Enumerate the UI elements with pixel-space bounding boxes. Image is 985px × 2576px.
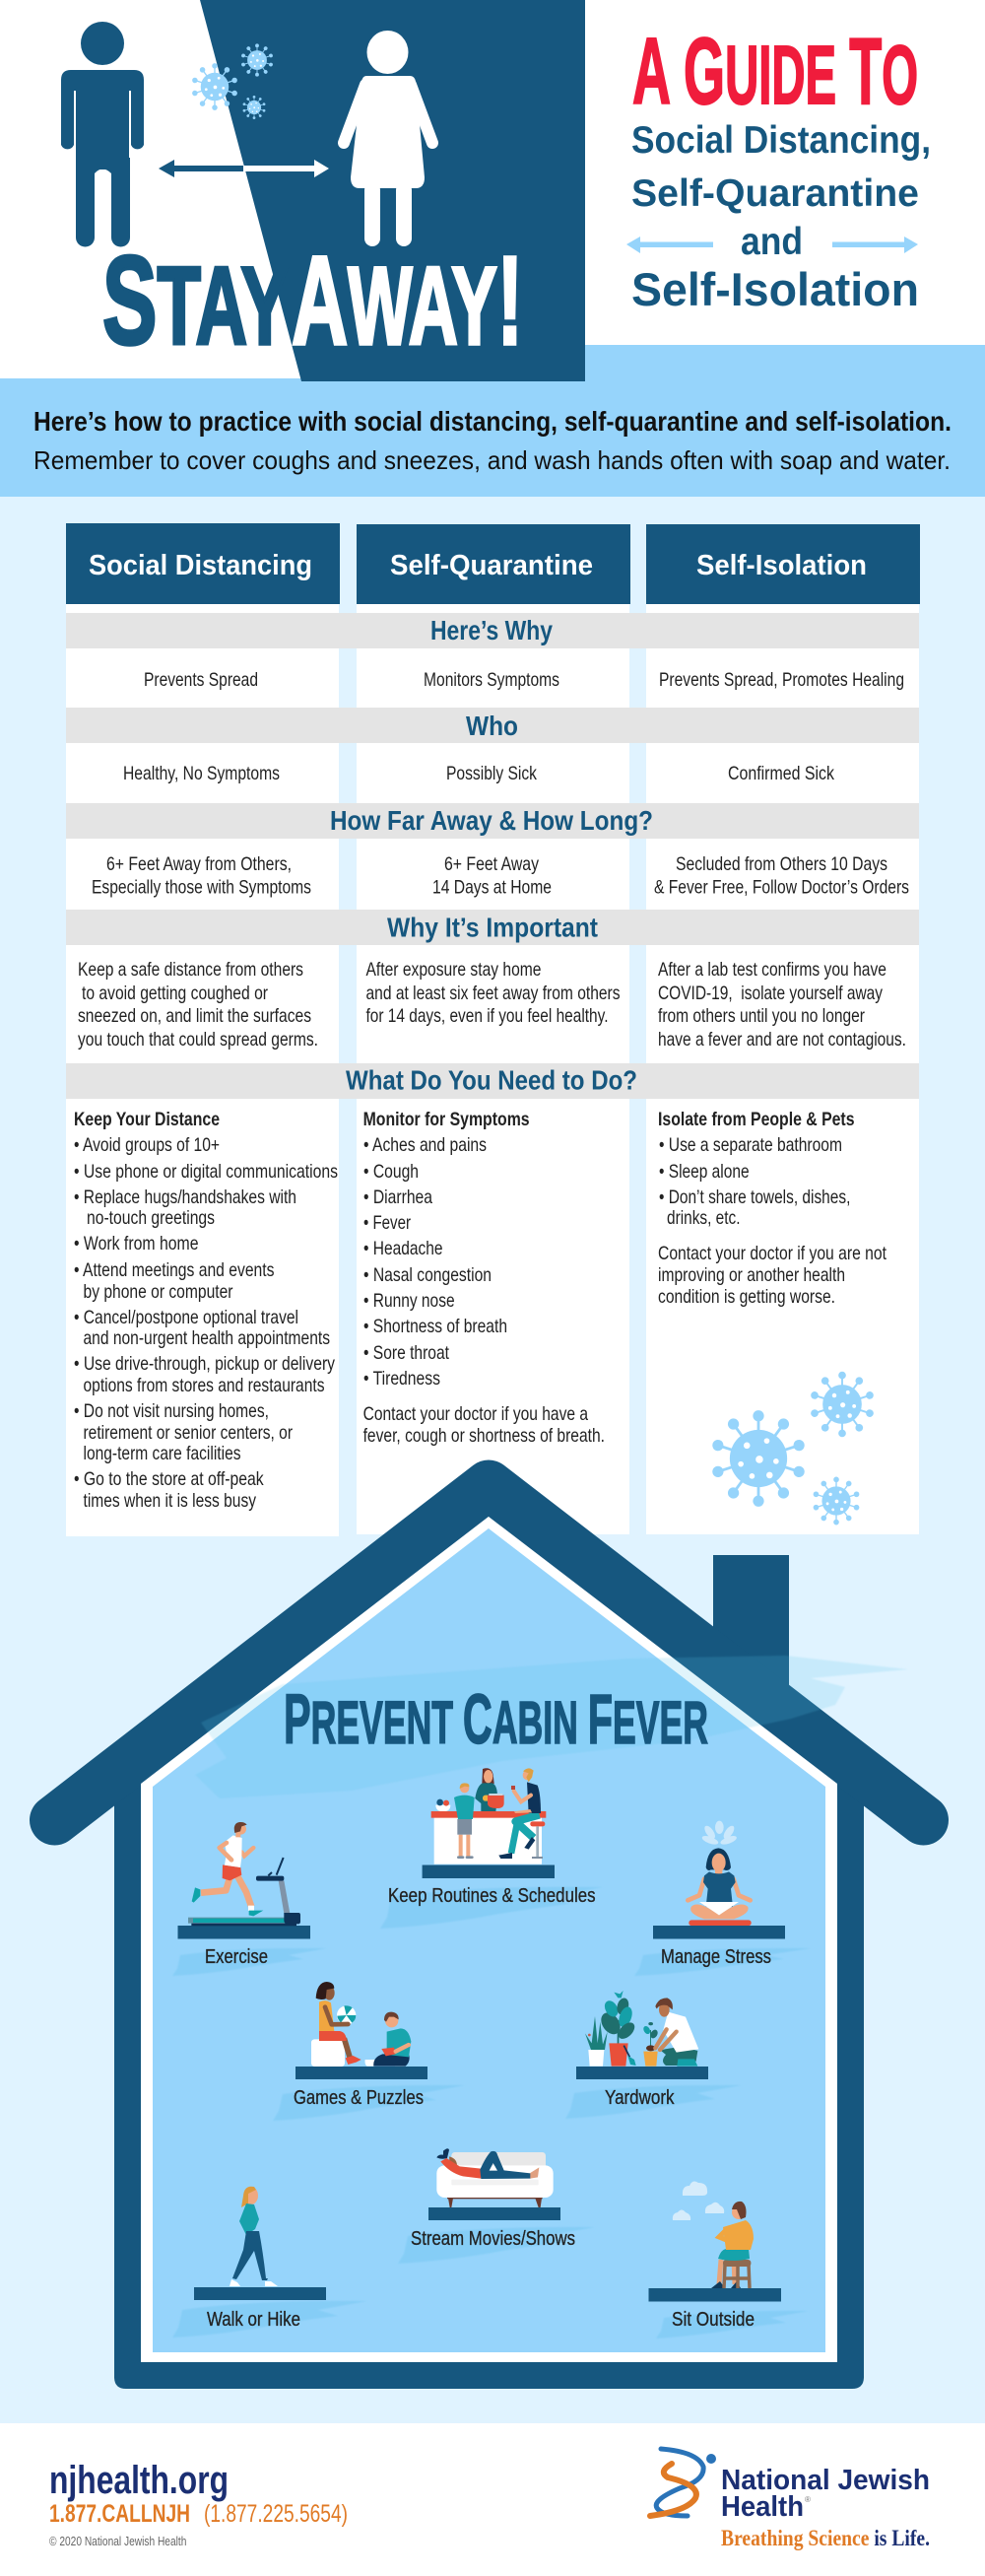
column: keep your distance: Keep Your Distance (74, 1109, 220, 1130)
logo tagline: Breathing Science is Life. (721, 2526, 930, 2550)
icon: virus group (192, 44, 273, 119)
interior light blue (153, 1528, 825, 2352)
illustration: children playing (311, 1982, 411, 2067)
heading: stay: STAY (102, 231, 289, 372)
column: isolate from people and pets (658, 1109, 886, 1308)
column: keep your distance: long-term care facilities (83, 1443, 241, 1464)
column: keep your distance: • Work from home (74, 1233, 199, 1254)
section: why it's important: you touch that could spread germs. (78, 1029, 318, 1051)
section: why it's important: have a fever and are not contagious. (658, 1029, 906, 1051)
section: how far away and how long: How Far Away & How Long? (330, 805, 653, 836)
column: monitor for symptoms: • Aches and pains (363, 1134, 487, 1156)
subtitle: self-isolation: Self-Isolation (631, 263, 919, 315)
subtitle: self-quarantine: Self-Quarantine (631, 172, 919, 215)
arrow: left (626, 237, 713, 253)
section: who: Healthy, No Symptoms (123, 763, 280, 784)
section: how far away and how long: Secluded from Others 10 Days (676, 853, 887, 875)
platform (423, 1864, 555, 1878)
chimney (713, 1555, 789, 1693)
column: keep your distance: options from stores and restaurants (83, 1375, 325, 1396)
platform (653, 1926, 785, 1939)
column: keep your distance: • Avoid groups of 10+ (74, 1134, 220, 1156)
intro regular line: Remember to cover coughs and sneezes, and wash hands often with soap and water. (33, 445, 951, 475)
section: why it's important: and at least six feet away from others (366, 983, 621, 1004)
website: njhealth.org (49, 2459, 229, 2502)
section: why it's important (78, 913, 906, 1051)
subtitle: social distancing: Social Distancing, (631, 119, 931, 162)
section: who (123, 711, 834, 784)
activity: manage stress (634, 1821, 811, 1976)
label: Stream Movies/Shows (411, 2227, 575, 2250)
header: self-isolation: Self-Isolation (696, 550, 867, 581)
section heading: what do you need to do: What Do You Need to Do? (346, 1064, 637, 1096)
dark angled panel (200, 0, 585, 381)
section: how far away and how long: 14 Days at Home (432, 877, 552, 899)
house walls (114, 1774, 864, 2389)
column: monitor for symptoms: • Headache (363, 1238, 443, 1259)
column: keep your distance: retirement or senior centers, or (83, 1422, 293, 1444)
section: here's why: Prevents Spread, Promotes Healing (659, 669, 904, 691)
activity: stream movies and shows (398, 2148, 595, 2264)
column: isolate from people and pets: Contact your doctor if you are not (658, 1243, 886, 1264)
column: isolate from people and pets: drinks, etc. (667, 1207, 741, 1229)
column: keep your distance: • Attend meetings and events (74, 1259, 275, 1281)
activity: exercise (172, 1822, 327, 1976)
platform (194, 2287, 326, 2300)
column: keep your distance: no-touch greetings (87, 1207, 215, 1229)
section: why it's important: for 14 days, even if you feel healthy. (366, 1005, 609, 1027)
section bands (66, 613, 919, 1099)
section: how far away and how long (92, 805, 909, 899)
section: why it's important: After a lab test confirms you have (658, 959, 886, 981)
column: keep your distance: • Do not visit nursing homes, (74, 1400, 269, 1422)
label: Sit Outside (672, 2308, 755, 2331)
platform (648, 2288, 781, 2302)
brush stroke behind heading (195, 1656, 908, 1798)
section: who: Confirmed Sick (728, 763, 834, 784)
column: keep your distance: times when it is less busy (83, 1490, 256, 1512)
heading: prevent cabin fever: PREVENT CABIN FEVER (284, 1681, 708, 1759)
platform (296, 2067, 427, 2079)
icon: woman (344, 31, 432, 246)
column: monitor for symptoms: • Tiredness (363, 1368, 440, 1390)
column: monitor for symptoms: Contact your doctor if you have a (363, 1403, 588, 1425)
section: who: Who (466, 711, 518, 741)
section: how far away and how long: Especially those with Symptoms (92, 877, 311, 899)
section: here's why (144, 615, 904, 691)
subtitle: and: and (741, 221, 803, 263)
platform (576, 2067, 708, 2079)
section: here's why: Here’s Why (430, 615, 553, 645)
phone word number: 1.877.CALLNJH (49, 2500, 190, 2528)
icon: virus cluster (713, 1373, 874, 1525)
illustration: meditating woman (688, 1821, 752, 1926)
label: Yardwork (605, 2086, 675, 2109)
column: isolate from people and pets: • Sleep alone (659, 1161, 750, 1183)
section: here's why: Monitors Symptoms (424, 669, 559, 691)
copyright: © 2020 National Jewish Health (49, 2534, 186, 2548)
column: keep your distance: and non-urgent health appointments (83, 1327, 330, 1349)
column: keep your distance: • Cancel/postpone optional travel (74, 1307, 298, 1328)
registered mark: ® (805, 2495, 811, 2504)
column: keep your distance: by phone or computer (83, 1281, 233, 1303)
column headers (66, 523, 920, 604)
section: why it's important: sneezed on, and limit the surfaces (78, 1005, 311, 1027)
column: monitor for symptoms: • Sore throat (363, 1342, 449, 1364)
activity: walk or hike (172, 2187, 367, 2338)
platform (177, 1926, 310, 1939)
logo name: National Jewish (721, 2465, 930, 2496)
column: monitor for symptoms: • Diarrhea (363, 1186, 432, 1208)
label: Manage Stress (661, 1945, 771, 1968)
section: how far away and how long: 6+ Feet Away (444, 853, 539, 875)
activity: keep routines and schedules (380, 1768, 603, 1929)
arrow between people (159, 160, 329, 177)
column: keep your distance: • Go to the store at off-peak (74, 1468, 264, 1490)
column: isolate from people and pets: • Use a separate bathroom (659, 1134, 842, 1156)
column: monitor for symptoms: Monitor for Symptoms (363, 1109, 530, 1130)
column: isolate from people and pets: condition is getting worse. (658, 1286, 835, 1308)
activity: yardwork (565, 1991, 742, 2119)
illustration: man on sofa (436, 2148, 554, 2207)
label: Keep Routines & Schedules (388, 1884, 596, 1907)
icon: man (61, 22, 144, 246)
illustration: person on stool with clouds (673, 2182, 754, 2288)
illustration: walking woman (230, 2187, 278, 2286)
intro band (0, 345, 985, 497)
column: monitor for symptoms: • Nasal congestion (363, 1264, 492, 1286)
illustration: gardener with plants (585, 1991, 698, 2067)
column: isolate from people and pets: improving or another health (658, 1264, 845, 1286)
section: why it's important: COVID-19, isolate yourself away (658, 983, 883, 1004)
header: self-quarantine: Self-Quarantine (390, 550, 593, 581)
illustration: runner on treadmill (188, 1822, 300, 1926)
icon: helix (650, 2449, 716, 2516)
section: here's why: Prevents Spread (144, 669, 258, 691)
column: monitor for symptoms: • Runny nose (363, 1290, 455, 1312)
column: monitor for symptoms (363, 1109, 605, 1447)
interior white border (141, 1517, 837, 2362)
header: social distancing: Social Distancing (89, 550, 312, 581)
activity: games and puzzles (273, 1982, 465, 2121)
arrow: right (832, 237, 918, 253)
title block (626, 19, 931, 315)
column: monitor for symptoms: • Cough (363, 1161, 419, 1183)
section: how far away and how long: & Fever Free, Follow Doctor’s Orders (654, 877, 909, 899)
activity: sit outside (648, 2182, 809, 2339)
section: why it's important: Why It’s Important (387, 913, 598, 942)
logo name second line: Health (721, 2491, 804, 2523)
column: keep your distance (74, 1109, 338, 1512)
section: who: Possibly Sick (446, 763, 537, 784)
illustration: family at kitchen counter (431, 1768, 546, 1864)
section: why it's important: Keep a safe distance from others (78, 959, 303, 981)
section: why it's important: to avoid getting coughed or (82, 983, 268, 1004)
label: Exercise (205, 1945, 268, 1968)
column: keep your distance: • Replace hugs/handshakes with (74, 1186, 296, 1208)
section: why it's important: After exposure stay home (366, 959, 542, 981)
label: Walk or Hike (207, 2308, 300, 2331)
column: keep your distance: • Use drive-through, pickup or delivery (74, 1353, 335, 1375)
section: why it's important: from others until you no longer (658, 1005, 865, 1027)
heading: away: AWAY! (292, 231, 523, 372)
roof (55, 1485, 924, 1820)
column: isolate from people and pets: • Don’t share towels, dishes, (659, 1186, 850, 1208)
hero illustration: stay away (61, 0, 585, 381)
column backgrounds (66, 604, 919, 1536)
column: isolate from people and pets: Isolate from People & Pets (658, 1109, 855, 1130)
column: keep your distance: • Use phone or digital communications (74, 1161, 338, 1183)
label: Games & Puzzles (294, 2086, 424, 2109)
page background (0, 497, 985, 2423)
column: monitor for symptoms: • Shortness of breath (363, 1316, 507, 1337)
column: monitor for symptoms: • Fever (363, 1212, 411, 1234)
title: a guide to: A GUIDE TO (632, 19, 918, 124)
house (55, 1485, 924, 2389)
section: how far away and how long: 6+ Feet Away from Others, (106, 853, 292, 875)
phone number: (1.877.225.5654) (204, 2500, 348, 2528)
platform (428, 2207, 560, 2220)
column: monitor for symptoms: fever, cough or shortness of breath. (363, 1425, 605, 1447)
footer contact (49, 2459, 348, 2548)
logo: national jewish health (650, 2449, 930, 2550)
comparison table (66, 523, 920, 1536)
